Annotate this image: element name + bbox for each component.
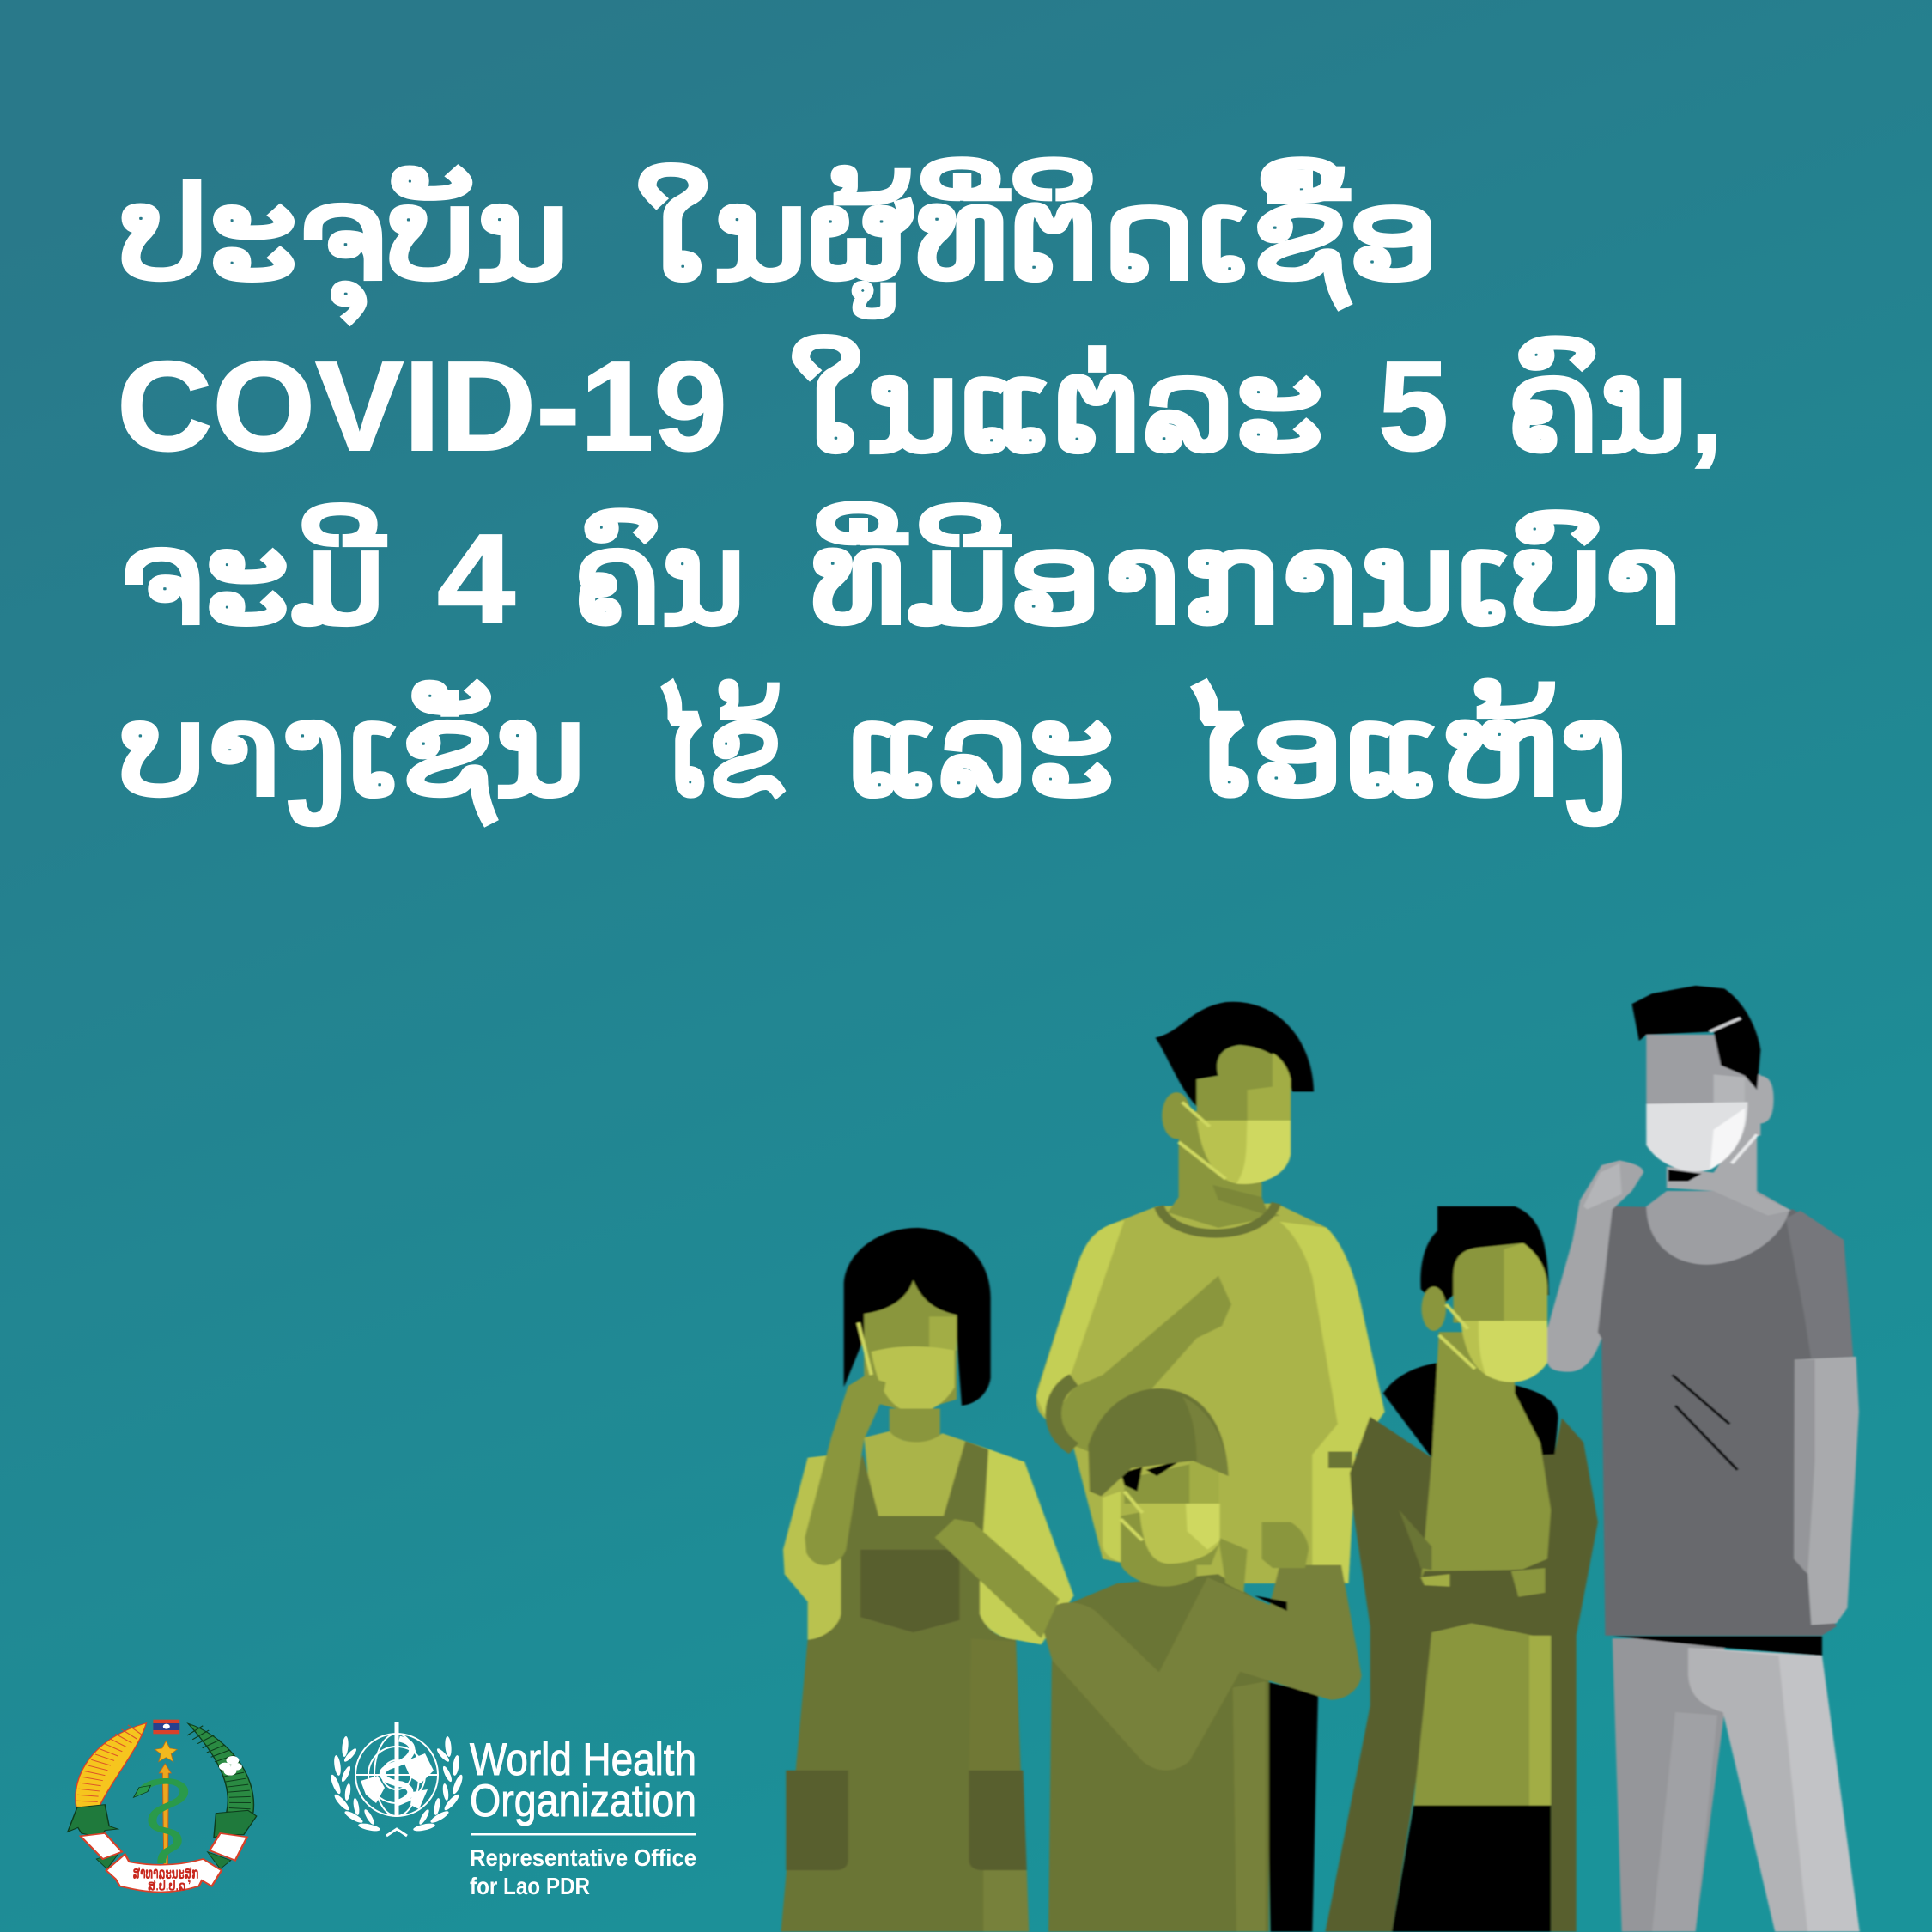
globe [355,1734,438,1816]
title [117,159,1725,825]
title: ຄົນ [573,508,745,650]
title: ໄຂ້ [653,680,784,822]
staff and snake [134,1764,184,1866]
title: COVID-19 [117,336,727,477]
WHO wordmark: World Health [470,1735,696,1785]
person: man in dark jacket [1325,1206,1598,1932]
person: man in grey t-shirt [1547,986,1860,1932]
WHO wordmark [470,1735,696,1899]
laurel left [329,1736,380,1832]
title: ໃນຜູ້ທີ່ຕິດເຊື້ອ [635,159,1439,317]
person: tall man in yellow shirt [1036,1002,1385,1932]
title: ຈະມີ [119,505,385,650]
logo: Lao Ministry of Health emblem [68,1720,257,1893]
WHO wordmark: for Lao PDR [470,1873,590,1899]
WHO wordmark: Representative Office [470,1844,696,1871]
ribbon text: ສ.ປ.ປ.ລ [148,1879,186,1893]
title: 5 [1378,336,1449,477]
illustration: five people wearing masks [781,986,1860,1932]
title: ຄົນ, [1506,336,1725,477]
logo: WHO emblem [329,1722,465,1836]
ribbons [81,1833,247,1892]
title: ປະຈຸບັນ [119,164,569,324]
title: ໃນແຕ່ລະ [788,336,1324,477]
laurel right [413,1736,465,1832]
ribbon text [133,1864,199,1893]
WHO wordmark: Organization [470,1776,696,1826]
title: ທີ່ມີອາການເບົາ [810,503,1682,650]
flag [153,1720,179,1734]
title: ບາງເຊັ່ນ [119,680,586,825]
title: ແລະ [848,680,1115,822]
person: girl in overalls [781,1228,1073,1932]
rice wreath [68,1723,146,1869]
flower [219,1756,242,1776]
title: ໄອແຫ້ງ [1181,680,1629,825]
person: child with cap [935,1388,1362,1932]
leaf wreath [188,1723,257,1869]
staff and serpent [382,1722,412,1816]
star [155,1741,177,1762]
logo: Lao Ministry of Health emblem: ສາທາລະນະສຸກ [133,1864,199,1885]
continents [361,1753,434,1809]
title: 4 [437,508,515,650]
